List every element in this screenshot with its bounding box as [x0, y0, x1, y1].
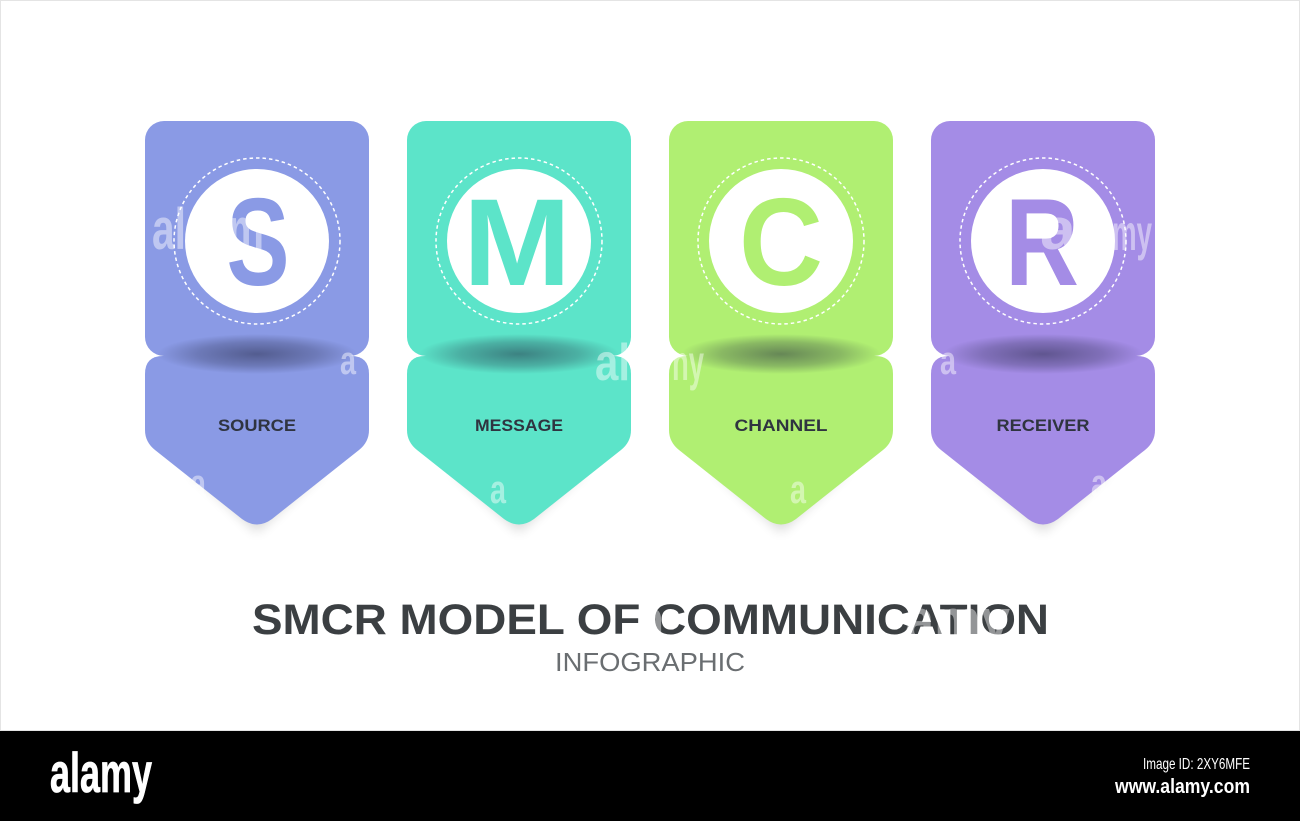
watermark overlay: a [490, 468, 507, 512]
alamy logo: alamy [50, 741, 152, 804]
upper card: message [407, 121, 631, 356]
dashed ring: source [174, 158, 340, 324]
label: source: SOURCE [218, 416, 296, 435]
upper card: channel [669, 121, 893, 356]
panel: channel [669, 121, 893, 532]
letter R: R [1005, 174, 1079, 312]
fold shadow: receiver [943, 334, 1143, 374]
white circle: source [185, 169, 329, 313]
watermark overlay: amy [905, 588, 1010, 653]
watermark overlay: my [1112, 205, 1152, 261]
watermark overlay: a [1091, 462, 1108, 506]
website: www.alamy.com [1114, 776, 1250, 798]
panel: source [145, 121, 369, 532]
watermark overlay: al [152, 197, 186, 262]
upper card: receiver [931, 121, 1155, 356]
dashed ring: channel [698, 158, 864, 324]
dashed ring: receiver [960, 158, 1126, 324]
watermark overlay: a [190, 462, 207, 506]
fold shadow: message [419, 334, 619, 374]
lower arrow: receiver [931, 356, 1155, 524]
title: SMCR MODEL OF COMMUNICATION [252, 596, 1049, 644]
subtitle: INFOGRAPHIC [555, 647, 745, 677]
footer bar [0, 731, 1300, 821]
lower arrow: message [407, 356, 631, 524]
watermark overlay: a [640, 588, 665, 653]
label: channel: CHANNEL [734, 416, 828, 435]
watermark overlay: ny [672, 335, 704, 391]
fold shadow: source [157, 334, 357, 374]
watermark overlay: a [940, 339, 957, 383]
lower arrow: channel [669, 356, 893, 524]
letter M: M [463, 174, 571, 312]
upper card: source [145, 121, 369, 356]
lower arrow: source [145, 356, 369, 524]
label: receiver: RECEIVER [996, 416, 1090, 435]
watermark overlay: m [228, 197, 264, 262]
white circle: message [447, 169, 591, 313]
letter S: S [226, 174, 290, 312]
watermark overlay [152, 197, 1152, 653]
fold shadow: channel [681, 334, 881, 374]
letter C: C [739, 174, 823, 312]
watermark overlay: al [595, 334, 630, 392]
white circle: channel [709, 169, 853, 313]
watermark overlay: a [340, 339, 357, 383]
panel: receiver [931, 121, 1155, 532]
label: message: MESSAGE [475, 416, 563, 435]
watermark overlay: a [1040, 197, 1077, 262]
image id: Image ID: 2XY6MFE [1143, 756, 1250, 773]
dashed ring: message [436, 158, 602, 324]
panel: message [407, 121, 631, 532]
white circle: receiver [971, 169, 1115, 313]
watermark overlay: a [790, 468, 807, 512]
